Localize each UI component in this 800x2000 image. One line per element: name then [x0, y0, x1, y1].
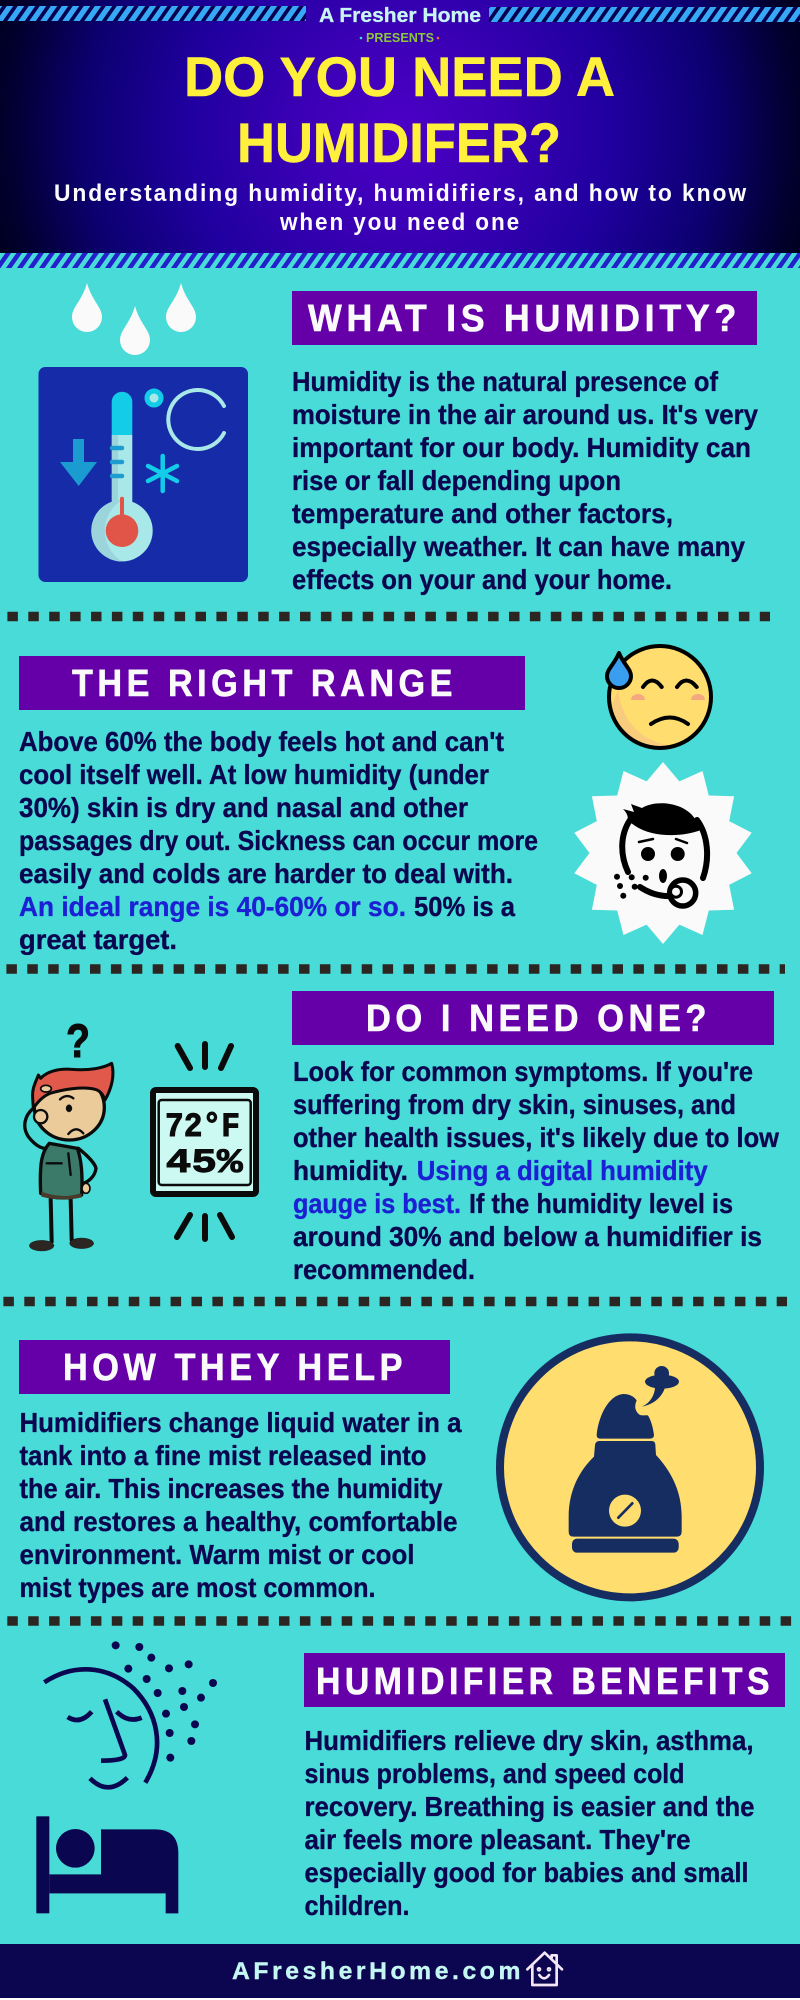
body text: Humidity is the natural presence of — [292, 366, 719, 397]
presents label: PRESENTS — [366, 31, 434, 45]
footer — [0, 1944, 800, 1998]
body text: sinus problems, and speed cold — [304, 1758, 684, 1789]
icon: confused man: ? — [66, 1014, 90, 1067]
body text: Above 60% the body feels hot and can't — [19, 726, 504, 757]
title: HUMIDIFER? — [237, 111, 561, 174]
body text — [19, 726, 538, 955]
panel: do I need one — [25, 991, 779, 1285]
subtitle: Understanding humidity, humidifiers, and how to know — [54, 180, 748, 207]
body text — [304, 1725, 754, 1921]
top stripes — [0, 6, 800, 22]
body text: Look for common symptoms. If you're — [293, 1056, 753, 1087]
body text: great target. — [19, 924, 177, 955]
body text: recommended. — [293, 1254, 475, 1285]
body text: suffering from dry skin, sinuses, and — [293, 1089, 736, 1120]
body text: rise or fall depending upon — [292, 465, 621, 496]
body text: easily and colds are harder to deal with. — [19, 858, 513, 889]
body text: If the humidity level is — [469, 1188, 733, 1219]
body text — [292, 366, 758, 595]
body text: the air. This increases the humidity — [20, 1473, 443, 1504]
body text: humidity. — [293, 1155, 408, 1186]
body text: 50% is a — [414, 891, 515, 922]
body text: temperature and other factors, — [292, 498, 673, 529]
heading: WHAT IS HUMIDITY? — [308, 298, 741, 340]
body text: effects on your and your home. — [292, 564, 672, 595]
icon: humidifier — [500, 1337, 760, 1597]
icon: humidity gauge: 72°F — [165, 1109, 240, 1147]
panel: how they help — [19, 1337, 760, 1603]
body text: especially weather. It can have many — [292, 531, 745, 562]
icon: confused man — [25, 1014, 113, 1251]
body text: important for our body. Humidity can — [292, 432, 751, 463]
icon: smiling house — [527, 1953, 562, 1985]
body text: mist types are most common. — [20, 1572, 376, 1603]
body text: gauge is best. — [293, 1188, 461, 1219]
heading: THE RIGHT RANGE — [72, 663, 457, 705]
body text: 30%) skin is dry and nasal and other — [19, 792, 468, 823]
icon: thermometer — [38, 367, 248, 582]
body text: passages dry out. Sickness can occur more — [19, 825, 538, 856]
body text — [293, 1056, 779, 1285]
icon: bed — [36, 1816, 178, 1913]
body text: especially good for babies and small — [304, 1857, 748, 1888]
body text: around 30% and below a humidifier is — [293, 1221, 762, 1252]
subtitle — [54, 180, 748, 236]
panel: what is humidity — [38, 283, 758, 595]
body text: An ideal range is 40-60% or so. — [19, 891, 406, 922]
body text: and restores a healthy, comfortable — [20, 1506, 458, 1537]
panel: the right range — [19, 646, 752, 955]
body text: Humidifiers relieve dry skin, asthma, — [304, 1725, 754, 1756]
brand name: A Fresher Home — [319, 5, 481, 27]
header banner — [0, 0, 800, 253]
icon: coughing person — [574, 762, 752, 944]
panel: humidifier benefits — [36, 1641, 785, 1921]
body text: children. — [304, 1890, 410, 1921]
website url: AFresherHome.com — [232, 1958, 524, 1985]
title: DO YOU NEED A — [184, 45, 615, 108]
body text: tank into a fine mist released into — [20, 1440, 426, 1471]
body text: moisture in the air around us. It's very — [292, 399, 758, 430]
icon: humidity gauge — [153, 1044, 256, 1239]
icon: water drops — [72, 283, 196, 355]
heading — [19, 1340, 450, 1394]
body text: air feels more pleasant. They're — [304, 1824, 690, 1855]
icon: humidity gauge: 45% — [166, 1145, 243, 1183]
body text: recovery. Breathing is easier and the — [304, 1791, 754, 1822]
heading — [292, 991, 774, 1045]
body text: environment. Warm mist or cool — [20, 1539, 414, 1570]
body text: cool itself well. At low humidity (under — [19, 759, 489, 790]
title — [184, 45, 615, 174]
subtitle: when you need one — [279, 209, 521, 236]
icon: sweating sad face — [607, 646, 711, 748]
body text: Humidifiers change liquid water in a — [20, 1407, 462, 1438]
body text: Using a digital humidity — [417, 1155, 708, 1186]
heading — [19, 656, 525, 710]
heading: HOW THEY HELP — [63, 1347, 407, 1389]
body text — [20, 1407, 462, 1603]
heading: DO I NEED ONE? — [366, 998, 711, 1040]
icon: sleeping face — [44, 1641, 217, 1787]
